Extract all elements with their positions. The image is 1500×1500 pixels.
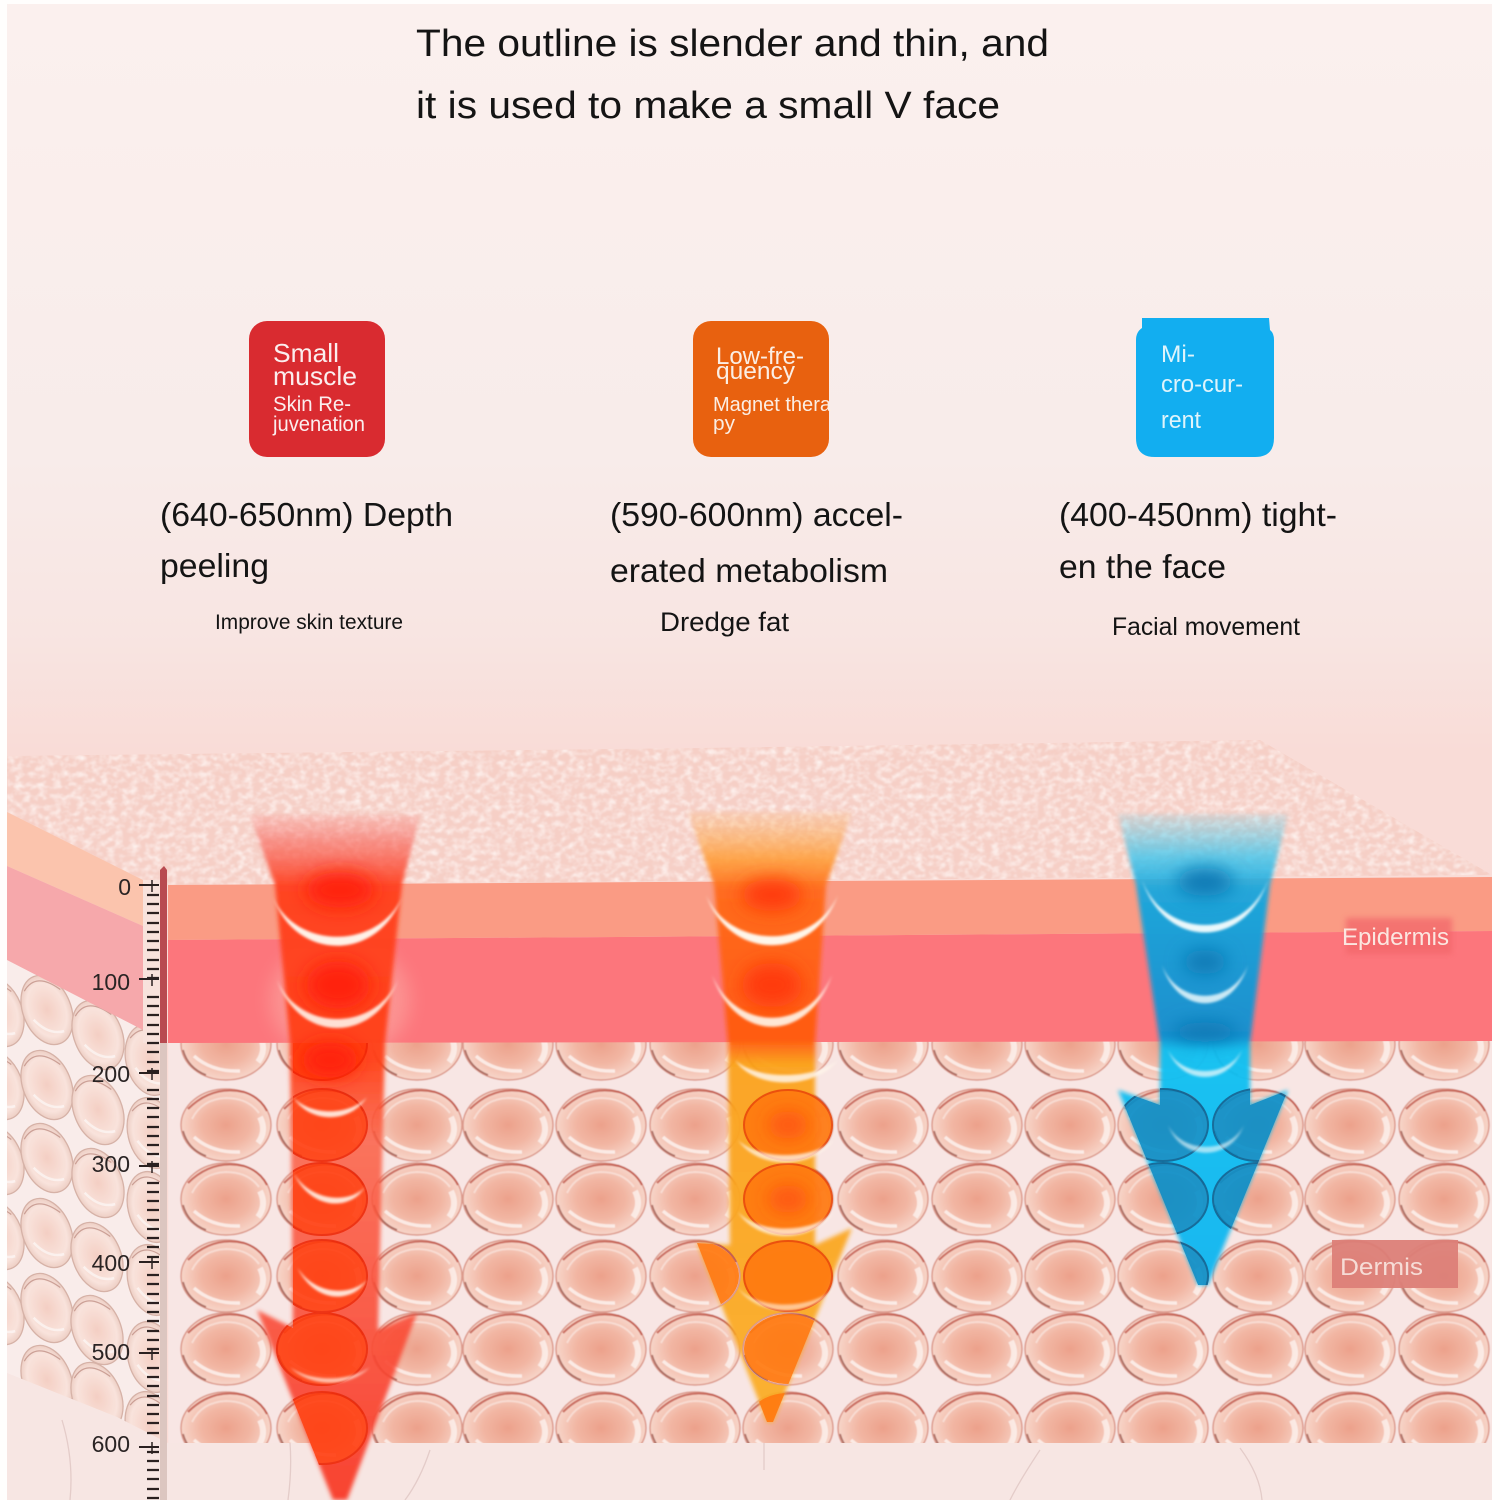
icon: small muscle badge: Small — [273, 338, 339, 368]
ruler ticks — [147, 895, 159, 1498]
title: The outline is slender and thin, and — [416, 23, 1049, 65]
icon: low-frequency badge: quency — [716, 358, 795, 385]
depth ruler — [92, 866, 167, 1500]
text: 590-600nm description: (590-600nm) accel- — [610, 496, 903, 533]
arrow: red 640-650nm beam — [250, 815, 420, 1500]
ruler labels: 400 — [92, 1250, 130, 1276]
text: 640-650nm description: (640-650nm) Depth — [160, 496, 453, 533]
text: 640-650nm description — [160, 496, 453, 634]
left-side perspective cells — [7, 960, 160, 1436]
ruler labels: 200 — [92, 1061, 130, 1087]
epidermis layer — [168, 877, 1492, 940]
ruler labels: 300 — [92, 1151, 130, 1177]
icon: low-frequency badge — [693, 321, 832, 457]
cell grid — [168, 1008, 1492, 1464]
icon: small muscle badge: juvenation — [272, 413, 365, 436]
text: 400-450nm description: (400-450nm) tight- — [1059, 496, 1337, 533]
title — [416, 23, 1049, 127]
ruler labels — [92, 874, 131, 1457]
text: 640-650nm description: Improve skin texture — [215, 611, 403, 634]
icon: low-frequency badge: py — [713, 413, 735, 435]
ruler labels: 600 — [92, 1431, 130, 1457]
ruler labels: 500 — [92, 1339, 130, 1365]
ruler backing strip — [143, 880, 160, 1043]
icon: low-frequency badge: Magnet thera — [713, 394, 832, 416]
text: 400-450nm description: Facial movement — [1112, 613, 1300, 641]
icon: micro-current badge — [1136, 318, 1274, 457]
icon: small muscle badge: Skin Re- — [273, 393, 351, 416]
arrow: orange 590-600nm beam — [688, 811, 854, 1425]
icon: small muscle badge — [249, 321, 385, 457]
icon: small muscle badge: muscle — [273, 361, 357, 391]
textured skin surface — [7, 740, 1492, 885]
text: 400-450nm description: en the face — [1059, 548, 1226, 585]
dermis layer — [168, 931, 1492, 1043]
left side epidermis band — [7, 812, 143, 926]
subcutaneous layer — [7, 1373, 1492, 1500]
text: 400-450nm description — [1059, 496, 1337, 641]
arrow: blue 400-450nm beam — [1118, 814, 1303, 1312]
icon: micro-current badge: rent — [1161, 407, 1201, 434]
ruler labels: 100 — [92, 969, 130, 995]
icon: micro-current badge: Mi- — [1161, 341, 1195, 368]
label: Epidermis: Epidermis — [1342, 924, 1449, 951]
title: it is used to make a small V face — [416, 85, 1000, 127]
label: Dermis — [1332, 1240, 1458, 1288]
left side dermis band — [7, 866, 143, 1030]
text: 590-600nm description: erated metabolism — [610, 552, 888, 589]
ruler labels: 0 — [118, 874, 131, 900]
text: 640-650nm description: peeling — [160, 547, 269, 584]
icon: micro-current badge: cro-cur- — [1161, 371, 1243, 398]
text: 590-600nm description: Dredge fat — [660, 607, 790, 637]
label: Dermis: Dermis — [1340, 1254, 1423, 1281]
text: 590-600nm description — [610, 496, 903, 637]
icon: low-frequency badge: Low-fre- — [716, 343, 804, 370]
skin cross-section diagram — [0, 740, 1492, 1500]
